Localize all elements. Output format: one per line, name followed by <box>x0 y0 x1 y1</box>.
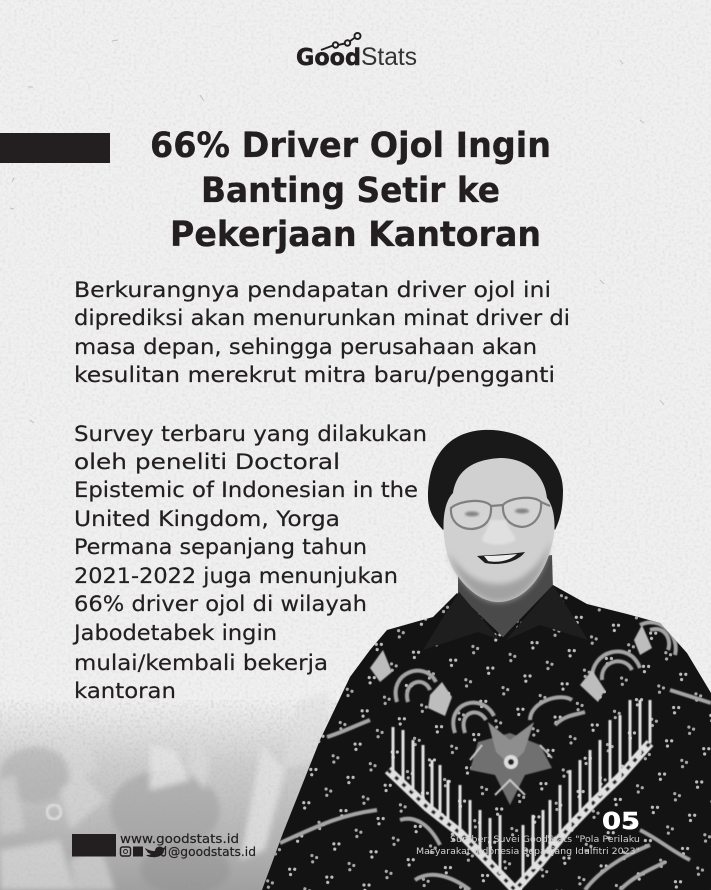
title: 66% Driver Ojol Ingin <box>150 126 551 166</box>
text block: survey paragraph: Permana sepanjang tahun <box>74 535 367 559</box>
footer: website and social handle <box>72 831 256 859</box>
logo: GoodStats <box>296 33 417 71</box>
batik central flower <box>470 722 552 805</box>
photo: smiling man in batik shirt <box>260 430 711 890</box>
batik scroll motifs <box>280 622 711 890</box>
text block: survey paragraph <box>72 422 427 703</box>
text block: intro paragraph: kesulitan merekrut mitra baru/pengganti <box>74 363 555 387</box>
text block: intro paragraph: diprediksi akan menurunkan minat driver di <box>74 306 570 330</box>
footer black block <box>72 834 116 856</box>
source note <box>416 835 640 857</box>
text block: intro paragraph: Berkurangnya pendapatan driver ojol ini <box>74 278 551 302</box>
glasses <box>451 498 550 529</box>
face <box>443 458 555 602</box>
shirt collar <box>423 592 500 650</box>
text block: survey paragraph: mulai/kembali bekerja <box>74 651 328 675</box>
page number: 05 <box>602 809 640 835</box>
website url: www.goodstats.id <box>120 831 239 846</box>
batik V chain <box>388 700 650 890</box>
text block: survey paragraph: 2021-2022 juga menunjukan <box>74 564 398 588</box>
text block: survey paragraph: kantoran <box>74 679 176 703</box>
logo: GoodStats: Good <box>296 45 361 71</box>
eyes <box>465 508 529 516</box>
batik shirt <box>260 580 711 890</box>
background photo: faded crowd of riders <box>0 690 420 890</box>
text block: survey paragraph: United Kingdom, Yorga <box>74 507 340 531</box>
neck <box>458 555 553 637</box>
nose <box>482 520 516 545</box>
logo: GoodStats: Stats <box>361 43 417 71</box>
text block: survey paragraph: Epistemic of Indonesian in the <box>74 478 418 502</box>
text block: intro paragraph <box>74 278 570 387</box>
decorative black bar <box>0 133 110 163</box>
text block: survey paragraph: 66% driver ojol di wilayah <box>74 592 367 616</box>
title <box>150 126 551 255</box>
source note: Masyarakat Indonesia Sepanjang Idulfitri 2023" <box>416 847 640 857</box>
title: Pekerjaan Kantoran <box>170 215 541 255</box>
text block: intro paragraph: masa depan, sehingga perusahaan akan <box>74 335 537 359</box>
icon: logo trend line <box>321 33 360 50</box>
social icons <box>120 846 166 857</box>
hair back <box>428 430 563 530</box>
source note: Sumber: Suvei GoodStats "Pola Perilaku <box>450 835 640 845</box>
text block: survey paragraph: Survey terbaru yang dilakukan <box>74 422 427 446</box>
text block: survey paragraph: Jabodetabek ingin <box>72 621 277 645</box>
smile <box>477 552 525 564</box>
title: Banting Setir ke <box>201 171 500 211</box>
social handle: @goodstats.id <box>168 844 256 859</box>
face shading <box>448 540 551 602</box>
text block: survey paragraph: oleh peneliti Doctoral <box>74 450 340 474</box>
